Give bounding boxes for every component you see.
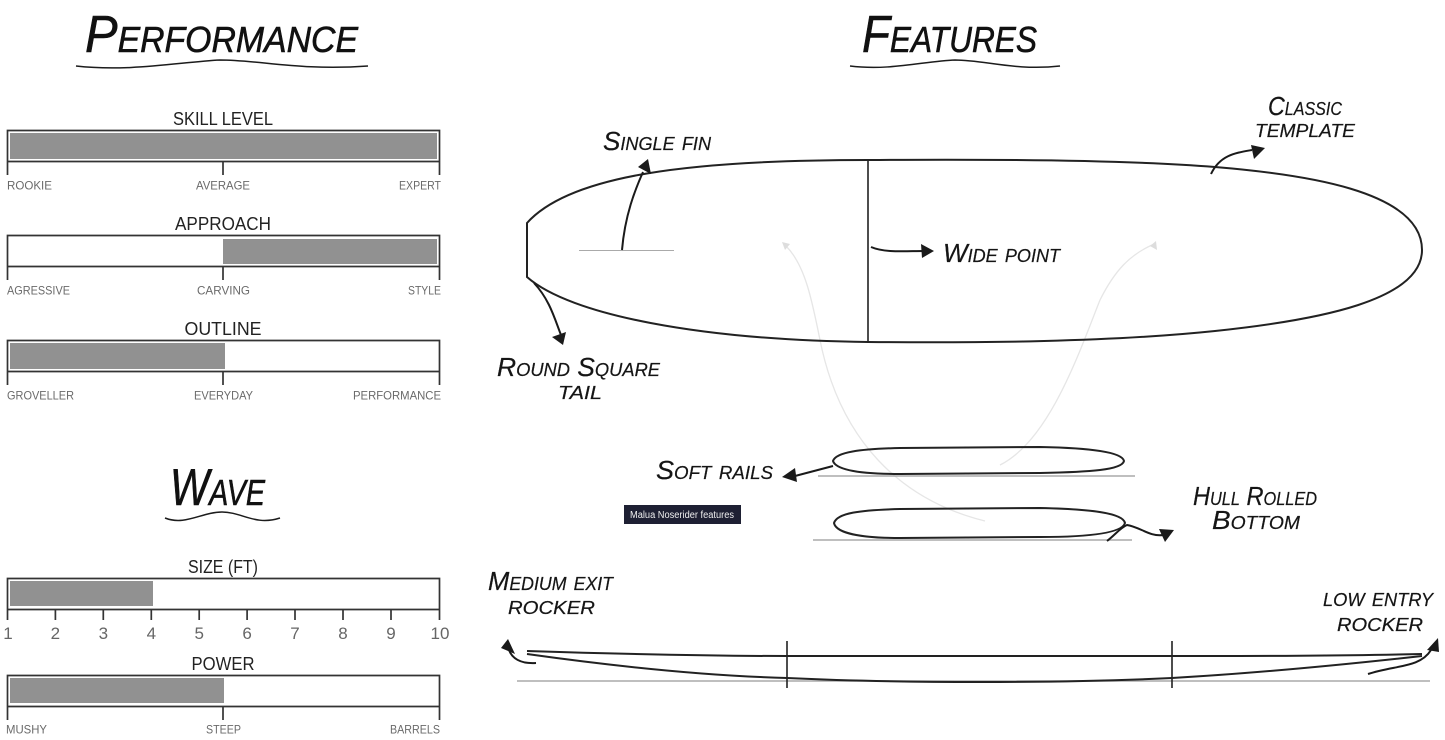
gauge: size in feet: 5: [194, 624, 204, 643]
gauge: size in feet: SIZE (FT): [188, 557, 258, 577]
gauge: approach: AGRESSIVE: [7, 284, 70, 298]
heading underline: features: [850, 60, 1060, 67]
callout: hull rolled bottom: Hull Rolled: [1193, 481, 1317, 511]
callout: round square tail: [497, 283, 661, 405]
callout: classic template: [1211, 91, 1356, 174]
panel: features: [488, 6, 1439, 688]
callout: wide point: [871, 238, 1062, 268]
gauge: size in feet: 1: [3, 624, 13, 643]
gauge: outline: EVERYDAY: [194, 388, 253, 402]
gauge: skill level: SKILL LEVEL: [173, 109, 273, 129]
gauge: size in feet: 2: [51, 624, 60, 643]
gauge: power: [6, 654, 440, 736]
heading underline: performance: [76, 60, 368, 68]
gauge: approach: STYLE: [408, 284, 441, 298]
callout: wide point: Wide point: [943, 238, 1062, 268]
rail cross-section: hull rolled bottom: [813, 508, 1132, 540]
heading underline: wave: [165, 512, 280, 520]
callout: classic template: Classic: [1268, 91, 1343, 121]
gauge: skill level: AVERAGE: [196, 178, 250, 192]
callout: soft rails: Soft rails: [656, 455, 773, 485]
callout: hull rolled bottom: Bottom: [1212, 505, 1300, 535]
heading: features: Features: [862, 6, 1037, 64]
callout: low entry rocker: rocker: [1337, 607, 1423, 637]
gauge: outline: PERFORMANCE: [353, 388, 441, 402]
callout: round square tail: Round Square: [497, 352, 661, 382]
faint background arrows: [782, 241, 1157, 521]
gauge: approach: APPROACH: [175, 214, 271, 234]
panel: wave: [3, 459, 449, 736]
callout: hull rolled bottom: [1107, 481, 1317, 542]
gauge: power: STEEP: [206, 722, 241, 736]
callout: soft rails: [656, 455, 833, 485]
gauge: power: POWER: [192, 654, 254, 674]
gauge: power: BARRELS: [390, 722, 440, 736]
gauge: power: MUSHY: [6, 722, 47, 736]
panel: performance: [7, 6, 442, 402]
gauge: outline: [7, 319, 441, 402]
gauge: skill level: EXPERT: [399, 178, 442, 192]
callout: medium exit rocker: Medium exit: [488, 566, 615, 596]
gauge: size in feet: 3: [99, 624, 108, 643]
heading: performance: Performance: [85, 6, 359, 64]
gauge: size in feet: [3, 557, 449, 643]
gauge: size in feet: 10: [431, 624, 449, 643]
gauge: size in feet: 8: [338, 624, 348, 643]
callout: low entry rocker: low entry: [1323, 582, 1435, 612]
gauge: skill level: [7, 109, 442, 192]
callout: round square tail: tail: [558, 375, 602, 405]
heading: wave: Wave: [170, 459, 266, 517]
rocker profile, side view: [517, 641, 1430, 688]
callout: low entry rocker: [1323, 582, 1439, 674]
callout: medium exit rocker: rocker: [508, 590, 595, 620]
surfboard outline, top view: [527, 160, 1422, 342]
callout: classic template: template: [1255, 113, 1356, 143]
gauge: approach: [7, 214, 441, 298]
callout: single fin: [603, 126, 712, 250]
callout: medium exit rocker: [488, 566, 615, 663]
gauge: skill level: ROOKIE: [7, 178, 52, 192]
gauge: outline: GROVELLER: [7, 388, 74, 402]
gauge: size in feet: 6: [242, 624, 252, 643]
caption tag: Malua Noserider features: [630, 510, 734, 521]
gauge: outline: OUTLINE: [184, 319, 262, 339]
callout: single fin: Single fin: [603, 126, 712, 156]
rail cross-section: soft rails: [818, 447, 1135, 476]
gauge: approach: CARVING: [197, 284, 250, 298]
gauge: size in feet: 9: [386, 624, 396, 643]
gauge: size in feet: 7: [290, 624, 300, 643]
gauge: size in feet: 4: [147, 624, 156, 643]
caption tag: [624, 505, 741, 524]
